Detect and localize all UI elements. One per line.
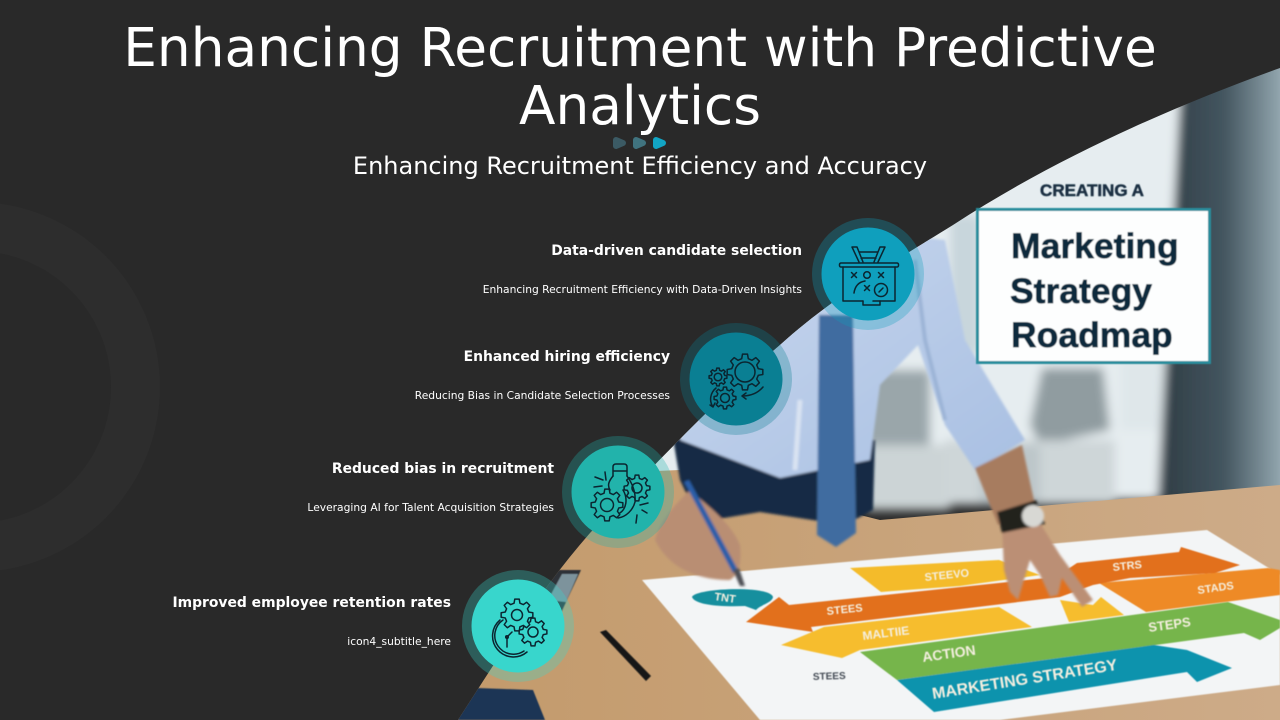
sign board	[978, 210, 1210, 362]
item 1 text	[483, 243, 802, 296]
sign kicker: CREATING A	[1040, 181, 1144, 200]
item 2 text: Reducing Bias in Candidate Selection Processes	[415, 389, 670, 402]
sign text	[1010, 226, 1179, 355]
sign text: Strategy	[1010, 271, 1152, 311]
table	[440, 470, 1280, 720]
photo: marketing strategy roadmap planning	[440, 50, 1280, 720]
title	[123, 17, 1157, 137]
poster labels: MARKETING STRATEGY	[931, 657, 1119, 703]
item 2: enhanced hiring efficiency	[415, 323, 792, 435]
item 2 text: Enhanced hiring efficiency	[464, 349, 670, 365]
item 3 badge	[562, 436, 674, 548]
poster labels: MALTIIE	[862, 623, 910, 643]
item 2 badge	[680, 323, 792, 435]
item 4 text: icon4_subtitle_here	[347, 635, 451, 648]
sign text: Marketing	[1011, 226, 1179, 266]
icon: stopwatch with gears	[493, 599, 547, 657]
item 4 text	[172, 595, 451, 648]
poster sheet	[642, 530, 1280, 720]
item 4 badge	[462, 570, 574, 682]
icon: light bulb with gears	[591, 464, 650, 523]
subtitle: Enhancing Recruitment Efficiency and Accuracy	[353, 152, 927, 180]
item 1 text: Enhancing Recruitment Efficiency with Data-Driven Insights	[483, 283, 802, 296]
item 2 text	[415, 349, 670, 402]
item 3 text: Reduced bias in recruitment	[332, 461, 554, 477]
title: Enhancing Recruitment with Predictive	[123, 17, 1157, 79]
icon: strategy board	[840, 247, 898, 305]
poster labels	[714, 559, 1235, 703]
decorative triangles	[616, 140, 663, 146]
item 4: improved employee retention rates	[172, 570, 574, 682]
sign text: Roadmap	[1011, 315, 1173, 355]
poster labels: STEES	[813, 671, 846, 683]
icon: rotating gears	[709, 354, 763, 409]
item 1 badge	[812, 218, 924, 330]
poster labels: STRS	[1112, 559, 1142, 574]
businessman	[655, 235, 1093, 607]
sign: creating a marketing strategy roadmap	[978, 181, 1210, 362]
poster labels: STADS	[1197, 580, 1235, 597]
item 4 text: Improved employee retention rates	[172, 595, 451, 611]
poster arrows	[692, 547, 1280, 712]
poster labels: STEEVO	[924, 567, 970, 584]
poster labels: TNT	[714, 591, 737, 606]
item 3 text	[307, 461, 554, 514]
item 1 text: Data-driven candidate selection	[551, 243, 802, 259]
office background	[655, 68, 1280, 518]
decorative ring	[0, 202, 160, 572]
item 3: reduced bias in recruitment	[307, 436, 674, 548]
title: Analytics	[519, 75, 761, 137]
poster labels: ACTION	[921, 642, 977, 665]
poster labels: STEES	[826, 602, 863, 618]
poster labels: STEPS	[1147, 614, 1192, 635]
item 3 text: Leveraging AI for Talent Acquisition Strategies	[307, 501, 554, 514]
item 1: data-driven candidate selection	[483, 218, 924, 330]
table pen and tablet	[440, 570, 651, 720]
